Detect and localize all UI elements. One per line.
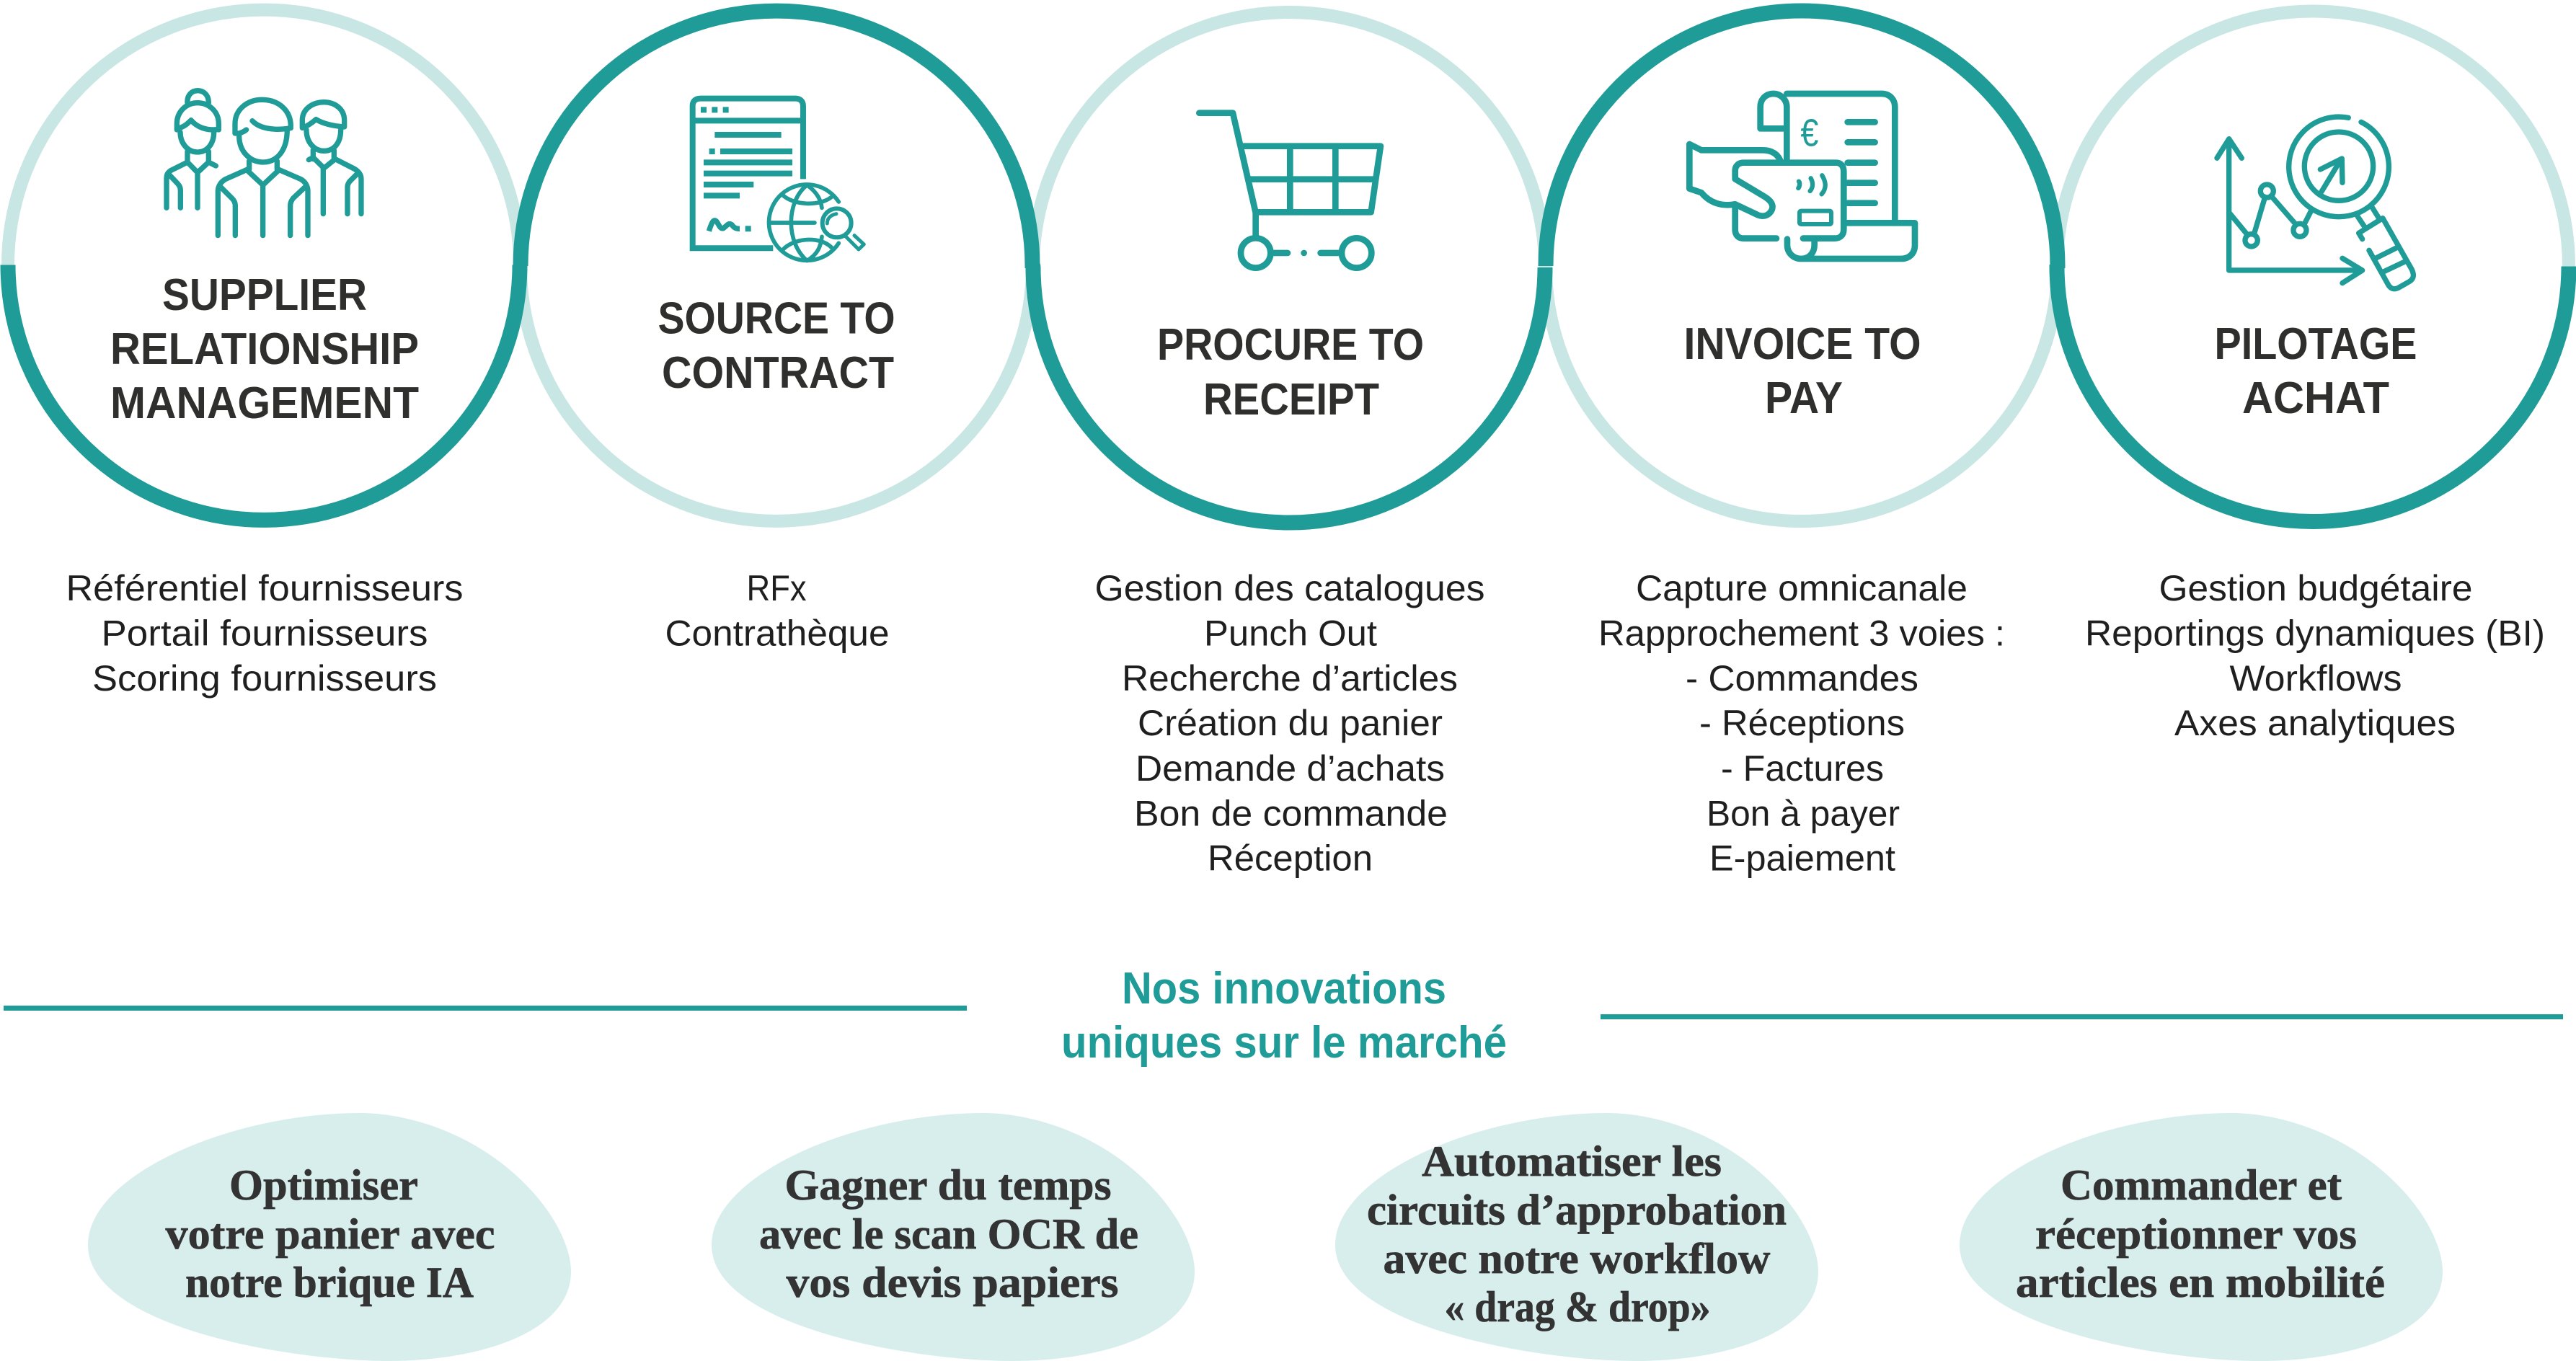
list: procure to receipt: Bon de commande <box>1134 793 1448 833</box>
icon: chart with magnifier <box>2217 117 2413 289</box>
rings: light halves <box>8 10 2569 521</box>
list: invoice to pay: E-paiement <box>1709 838 1895 878</box>
ring 3 light top <box>1033 12 1545 267</box>
list: invoice to pay: - Factures <box>1721 748 1884 789</box>
list: source to contract: RFx <box>747 568 806 608</box>
list: procure to receipt: Recherche d’articles <box>1122 658 1458 699</box>
ring 1 light top <box>8 10 520 265</box>
list: supplier relationship management: Portail fournisseurs <box>101 613 428 653</box>
heading: procure to receipt: RECEIPT <box>1203 375 1379 425</box>
list: invoice to pay: Rapprochement 3 voies : <box>1598 613 2005 653</box>
callout: scan OCR: vos devis papiers <box>786 1259 1119 1306</box>
heading: pilotage achat: PILOTAGE <box>2215 319 2417 369</box>
callout: mobilité: Commander et <box>2061 1161 2342 1209</box>
callout: scan OCR <box>712 1113 1195 1361</box>
list: source to contract <box>665 568 890 653</box>
heading: procure to receipt: PROCURE TO <box>1157 320 1424 370</box>
list: invoice to pay: - Réceptions <box>1699 703 1905 743</box>
callout: workflow <box>1335 1113 1818 1361</box>
icon: shopping cart <box>1199 113 1381 268</box>
ring 1 dark bottom <box>8 265 520 520</box>
heading: procure to receipt <box>1157 320 1424 425</box>
list: invoice to pay <box>1598 568 2005 878</box>
section title: innovations: uniques sur le marché <box>1061 1018 1507 1068</box>
list: pilotage achat: Workflows <box>2229 658 2402 699</box>
heading: supplier relationship management: MANAGEMENT <box>110 378 419 428</box>
list: source to contract: Contrathèque <box>665 613 890 653</box>
heading: invoice to pay: INVOICE TO <box>1684 319 1921 369</box>
ring 2 dark top <box>521 11 1032 268</box>
heading: invoice to pay <box>1684 319 1921 423</box>
heading: pilotage achat <box>2215 319 2417 423</box>
callout: workflow: « drag & drop» <box>1445 1283 1710 1331</box>
list: procure to receipt: Demande d’achats <box>1136 748 1445 789</box>
rings: dark halves <box>8 11 2569 523</box>
list: supplier relationship management: Référentiel fournisseurs <box>66 568 463 608</box>
ring 5 dark bottom <box>2057 265 2569 522</box>
heading: supplier relationship management: RELATIONSHIP <box>110 324 419 374</box>
icon: invoice and card payment: € <box>1800 112 1818 155</box>
icon: invoice and card payment <box>1689 94 1915 259</box>
heading: pilotage achat: ACHAT <box>2242 373 2389 423</box>
list: pilotage achat: Gestion budgétaire <box>2159 568 2473 608</box>
callout: mobilité: articles en mobilité <box>2016 1259 2385 1306</box>
heading: invoice to pay: PAY <box>1765 373 1843 423</box>
callout: scan OCR: avec le scan OCR de <box>759 1210 1138 1258</box>
callout: workflow: Automatiser les <box>1422 1138 1722 1185</box>
icon: contract with globe <box>693 99 864 261</box>
list: supplier relationship management <box>66 568 463 699</box>
callout: panier IA <box>88 1113 571 1361</box>
callout: workflow: circuits d’approbation <box>1367 1187 1787 1234</box>
callout: scan OCR: Gagner du temps <box>784 1161 1112 1209</box>
list: procure to receipt: Réception <box>1208 838 1373 878</box>
list: procure to receipt <box>1094 568 1485 878</box>
section title: innovations: Nos innovations <box>1122 964 1446 1014</box>
list: procure to receipt: Création du panier <box>1138 703 1443 743</box>
list: pilotage achat <box>2085 568 2545 743</box>
ring 2 light bottom <box>521 266 1032 521</box>
list: invoice to pay: Capture omnicanale <box>1636 568 1968 608</box>
callout: panier IA: notre brique IA <box>185 1259 474 1306</box>
ring 4 light bottom <box>1546 266 2058 521</box>
list: pilotage achat: Axes analytiques <box>2174 703 2456 743</box>
heading: source to contract: SOURCE TO <box>658 294 895 343</box>
list: procure to receipt: Punch Out <box>1204 613 1377 653</box>
heading: supplier relationship management: SUPPLIER <box>162 270 367 320</box>
ring 5 light top <box>2057 12 2569 267</box>
callout: mobilité <box>1960 1113 2443 1361</box>
list: invoice to pay: Bon à payer <box>1707 793 1900 833</box>
list: supplier relationship management: Scoring fournisseurs <box>92 658 437 699</box>
callout: panier IA: Optimiser <box>229 1161 418 1209</box>
callout: mobilité: réceptionner vos <box>2035 1210 2357 1258</box>
callout: panier IA: votre panier avec <box>166 1210 495 1258</box>
section title: innovations <box>4 964 2563 1068</box>
heading: source to contract: CONTRACT <box>662 348 894 398</box>
list: pilotage achat: Reportings dynamiques (BI) <box>2085 613 2545 653</box>
callout: workflow: avec notre workflow <box>1383 1235 1771 1282</box>
heading: source to contract <box>658 294 895 398</box>
list: procure to receipt: Gestion des catalogues <box>1094 568 1485 608</box>
ring 3 dark bottom <box>1032 265 1545 523</box>
icon: three people <box>167 91 361 236</box>
ring 4 dark top <box>1546 11 2058 268</box>
list: invoice to pay: - Commandes <box>1686 658 1918 699</box>
heading: supplier relationship management <box>110 270 419 428</box>
